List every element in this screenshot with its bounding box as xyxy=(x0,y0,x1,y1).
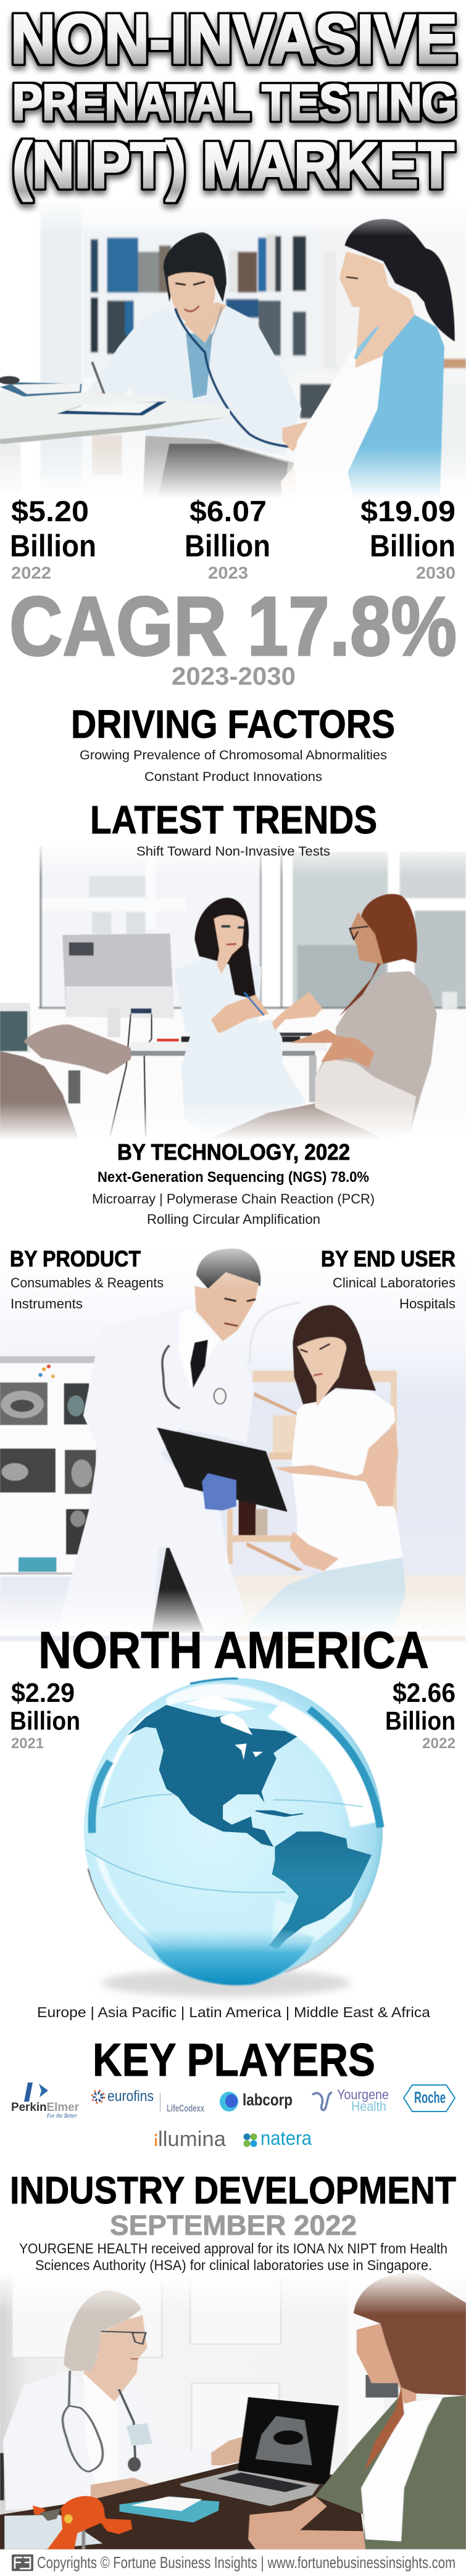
company logos xyxy=(11,2083,455,2151)
logo: labcorp xyxy=(220,2091,293,2112)
stat 2030: Billion xyxy=(370,529,456,563)
latest trends text: Shift Toward Non-Invasive Tests xyxy=(136,844,330,859)
photo: doctor examining pregnant patient xyxy=(0,195,466,521)
stat 2023: $6.07 xyxy=(189,495,267,527)
globe base xyxy=(139,1926,315,1985)
fades xyxy=(0,840,466,1141)
value 2021: Billion xyxy=(10,1706,80,1735)
instruments: Instruments xyxy=(10,1296,83,1311)
value 2022 xyxy=(385,1678,456,1752)
pregnant patient xyxy=(208,894,437,1139)
logo: eurofins LifeCodexx xyxy=(92,2088,204,2114)
globe shadow xyxy=(101,1969,351,1997)
desk xyxy=(0,376,230,494)
continent: south america xyxy=(269,1831,372,1949)
heading: latest trends: LATEST TRENDS xyxy=(90,798,377,842)
top fade xyxy=(0,2271,466,2314)
value 2021: $2.29 xyxy=(11,1678,75,1708)
value 2022: Billion xyxy=(385,1706,456,1735)
icon: Fortune Business Insights logo xyxy=(12,2554,33,2571)
wooden shelf xyxy=(227,1303,397,1571)
logo: PerkinElmer xyxy=(11,2083,80,2120)
logo: eurofins LifeCodexx: LifeCodexx xyxy=(167,2103,204,2114)
whiteboard with ultrasound scans xyxy=(0,1356,96,1577)
fades xyxy=(0,1234,466,1636)
value 2021: 2021 xyxy=(11,1735,44,1752)
consumables: Consumables & Reagents xyxy=(10,1275,164,1290)
lab report xyxy=(4,2515,102,2549)
logo: Yourgene Health: Health xyxy=(351,2099,386,2114)
stat 2030 xyxy=(360,495,456,582)
driving factors list: Constant Product Innovations xyxy=(144,770,322,784)
other segments: Microarray | Polymerase Chain Reaction (PCR) xyxy=(92,1191,375,1207)
logo: PerkinElmer: For the Better xyxy=(46,2112,78,2120)
glass rim xyxy=(86,1678,380,1972)
office windows xyxy=(0,846,466,1141)
logo: natera: natera xyxy=(260,2127,312,2149)
logo: eurofins LifeCodexx: eurofins xyxy=(107,2088,154,2105)
doctor xyxy=(3,2290,281,2511)
footer xyxy=(0,2549,466,2576)
clinical laboratories: Clinical Laboratories xyxy=(333,1275,456,1290)
logo: Roche: Roche xyxy=(414,2088,446,2107)
continent: north america xyxy=(128,1705,297,1847)
hudson bay and great lakes xyxy=(185,1695,263,1760)
stat 2022: Billion xyxy=(10,529,96,563)
heading: by product: BY PRODUCT xyxy=(10,1246,141,1271)
stat 2022: 2022 xyxy=(11,563,51,582)
stat 2030: 2030 xyxy=(416,563,456,582)
value 2022: $2.66 xyxy=(393,1678,456,1708)
rolling circular: Rolling Circular Amplification xyxy=(147,1212,320,1227)
value 2022: 2022 xyxy=(422,1735,456,1752)
stat 2023: 2023 xyxy=(208,563,248,582)
north america values xyxy=(10,1678,456,1752)
pregnant patient xyxy=(238,1305,406,1633)
stat 2023: Billion xyxy=(185,529,270,563)
stat 2022: $5.20 xyxy=(11,495,89,527)
clinic background xyxy=(0,202,466,513)
door background xyxy=(0,2272,466,2549)
photo: doctor consulting patient at desk xyxy=(0,840,466,1141)
logo: illumina: llumina xyxy=(158,2128,226,2151)
doctor xyxy=(174,898,322,1139)
hospitals: Hospitals xyxy=(399,1296,456,1311)
doctor xyxy=(79,233,307,500)
industry development text: Sciences Authority (HSA) for clinical laboratories use in Singapore. xyxy=(35,2257,432,2273)
value 2021 xyxy=(10,1678,80,1752)
photo: doctor showing clipboard to patient xyxy=(0,1234,466,1641)
CAGR period: 2023-2030 xyxy=(172,662,296,690)
glass sphere xyxy=(84,1678,383,1983)
industry development text xyxy=(19,2240,447,2273)
computer monitor xyxy=(0,933,174,1136)
caribbean islands xyxy=(256,1811,303,1817)
heading: by technology: BY TECHNOLOGY, 2022 xyxy=(117,1139,350,1165)
leading segment: Next-Generation Sequencing (NGS) 78.0% xyxy=(98,1169,369,1186)
logo: Roche xyxy=(404,2085,455,2112)
by technology block xyxy=(92,1139,375,1227)
heading: key players: KEY PLAYERS xyxy=(93,2034,375,2086)
heading: north america: NORTH AMERICA xyxy=(38,1621,429,1679)
logo: labcorp: labcorp xyxy=(243,2091,293,2109)
by end user block xyxy=(321,1246,456,1311)
top and bottom fade xyxy=(0,195,466,521)
notebook xyxy=(120,2496,219,2522)
uterus anatomy model xyxy=(33,2496,132,2549)
pregnant patient xyxy=(281,219,455,500)
lower-left dark rim xyxy=(89,1868,235,1983)
stat 2023 xyxy=(185,495,270,582)
desk xyxy=(0,2463,365,2549)
driving factors list xyxy=(80,748,387,784)
logo: Yourgene Health xyxy=(312,2087,389,2114)
other regions: Europe | Asia Pacific | Latin America | Middle East & Africa xyxy=(37,2004,430,2020)
sphere highlights xyxy=(95,1684,378,1976)
date: SEPTEMBER 2022 xyxy=(110,2210,357,2241)
pregnant patient xyxy=(248,2272,466,2549)
title xyxy=(10,1,457,202)
heading: driving factors: DRIVING FACTORS xyxy=(71,702,395,746)
exam chair xyxy=(0,1025,132,1139)
clinic wall xyxy=(0,1234,466,1641)
by product block xyxy=(10,1246,164,1311)
doctor xyxy=(56,1249,288,1633)
globe xyxy=(84,1678,383,1997)
logo: PerkinElmer: PerkinElmer xyxy=(11,2101,80,2114)
driving factors list: Growing Prevalence of Chromosomal Abnormalities xyxy=(80,748,387,762)
stat 2022 xyxy=(10,495,96,582)
photo: doctor reviewing ultrasound with patient xyxy=(0,2271,466,2549)
desk xyxy=(131,1033,327,1102)
market size stats xyxy=(10,495,456,582)
laptop xyxy=(180,2397,339,2506)
stat 2030: $19.09 xyxy=(360,495,456,527)
logo: Yourgene Health: Yourgene xyxy=(337,2087,389,2102)
